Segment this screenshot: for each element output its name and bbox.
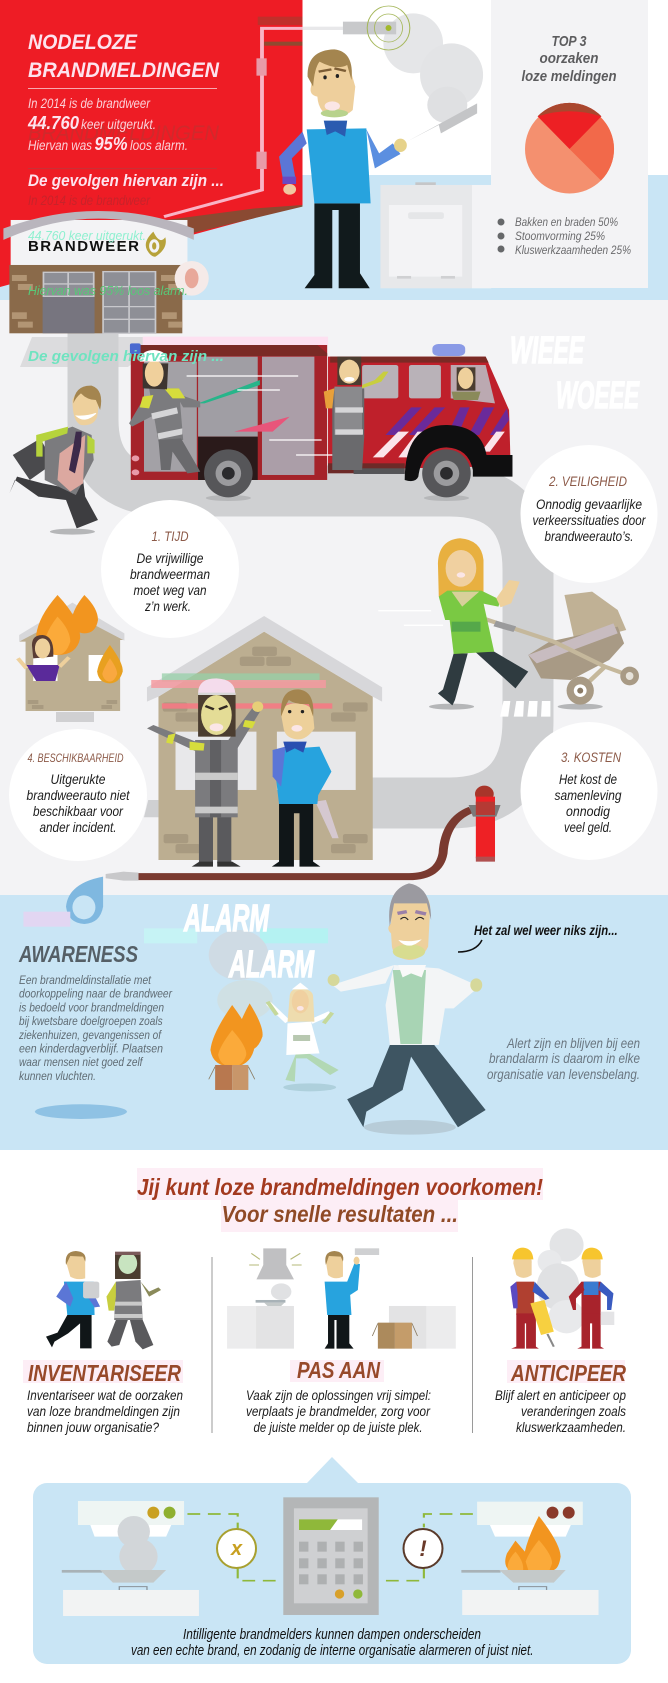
illustration: pas aan (227, 1248, 456, 1349)
callout circle: 2. veiligheid: brandweerauto’s. (544, 528, 634, 544)
pie legend (498, 217, 631, 257)
hydrant and hose (106, 786, 501, 881)
callout circle: 2. veiligheid: verkeerssituaties door (532, 512, 647, 528)
inventariseer text (27, 1360, 183, 1435)
title block: Hiervan was (28, 138, 92, 153)
title block: BRANDMELDINGEN (28, 122, 220, 145)
callout circle: 1. tijd: brandweerman (130, 566, 210, 582)
pas aan text: PAS AAN (297, 1357, 380, 1383)
kitchen cabinet (380, 182, 491, 288)
smart detector caption: van een echte brand, en zodanig de interne organisatie alarmeren of juist niet. (131, 1643, 534, 1659)
callout circle: 1. tijd: De vrijwillige (136, 550, 204, 566)
title block: In 2014 is de brandweer (28, 193, 150, 208)
callout circle: 1. tijd: moet weg van (134, 582, 207, 598)
anticipeer text: Blijf alert en anticipeer op (495, 1387, 626, 1403)
small house foundation (56, 712, 94, 722)
callout circle: 1. tijd (101, 500, 239, 638)
panel: smart detector (33, 1457, 631, 1664)
fire station (6, 213, 209, 333)
dividers (212, 1257, 473, 1433)
character: angry firefighter (147, 678, 263, 867)
awareness text: een kinderdagverblijf. Plaatsen (19, 1042, 163, 1056)
anticipeer text: veranderingen zoals (521, 1403, 626, 1419)
callout circle: 4. beschikbaarheid: 4. BESCHIKBAARHEID (28, 751, 124, 765)
awareness text: Een brandmeldinstallatie met (19, 973, 152, 987)
panel: top 3 heading: loze meldingen (522, 68, 616, 85)
character: woman with stroller (378, 538, 639, 717)
illustration: inventariseer (46, 1251, 161, 1349)
pie legend: Bakken en braden 50% (515, 217, 618, 229)
awareness text: bij kwetsbare doelgroepen zoals (19, 1014, 163, 1028)
ghost labels over fire station: Hiervan was 95% loos alarm. (28, 283, 188, 298)
anticipeer text: kluswerkzaamheden. (516, 1419, 626, 1435)
icon: detector with steam (62, 1501, 199, 1616)
alert text: organisatie van levensbelang. (487, 1066, 640, 1082)
panel: top 3 background (491, 0, 648, 288)
sound effect text: WIEEE (510, 330, 585, 372)
title block: 44.760 (27, 113, 79, 133)
icon: exclamation status: ! (419, 1536, 427, 1561)
inventariseer text: van loze brandmeldingen zijn (27, 1403, 180, 1419)
pie chart: oorzaken (525, 103, 614, 194)
inventariseer text: INVENTARISEER (28, 1360, 181, 1386)
pale tint blocks behind headings (23, 1168, 625, 1383)
awareness text: ziekenhuizen, gevangenissen of (18, 1028, 162, 1042)
callout circle: 3. kosten: veel geld. (564, 819, 612, 835)
ghost teal label: De gevolgen hiervan zijn ... (28, 348, 224, 365)
title block: NODELOZE (28, 31, 138, 54)
alert text (487, 1035, 640, 1082)
inventariseer text: binnen jouw organisatie? (27, 1419, 159, 1435)
title block: keer uitgerukt. (81, 117, 156, 132)
character: truck driver (452, 367, 481, 400)
panel: top 3 heading: TOP 3 (552, 33, 587, 50)
fire station sign: BRANDWEER (28, 238, 139, 255)
pie legend: Kluswerkzaamheden 25% (515, 245, 631, 257)
icon: exclamation status (404, 1529, 442, 1568)
illustration: anticipeer (510, 1228, 614, 1349)
title block: loos alarm. (130, 138, 188, 153)
dashed connectors (187, 1514, 473, 1581)
sound effect text (510, 330, 640, 417)
inventariseer text: Inventariseer wat de oorzaken (27, 1387, 183, 1403)
title block: 95% (94, 134, 128, 154)
awareness text: doorkoppeling naar de brandweer (19, 987, 173, 1001)
icon: water drop ring and puddle (23, 877, 328, 1119)
awareness text: AWARENESS (18, 941, 139, 967)
character: laughing doctor (328, 883, 486, 1135)
panel: top 3 heading: oorzaken (540, 50, 598, 67)
alarm pipe and detector (164, 6, 483, 233)
callout circle: 1. tijd: 1. TIJD (152, 528, 188, 544)
character: nurse (268, 983, 339, 1091)
character: firefighter on rear step (129, 350, 200, 473)
character: running volunteer (9, 386, 101, 535)
pas aan text: verplaats je brandmelder, zorg voor (246, 1403, 431, 1419)
pie legend: Stoomvorming 25% (515, 231, 605, 243)
callout circle: 3. kosten: onnodig (566, 803, 610, 819)
icon: detector with flames (461, 1502, 599, 1615)
icon: control panel (283, 1497, 379, 1615)
callout circle: 3. kosten: samenleving (554, 787, 622, 803)
section heading: Voor snelle resultaten ... (222, 1201, 458, 1227)
burning box with smoke (209, 930, 273, 1090)
section heading: Jij kunt loze brandmeldingen voorkomen! (137, 1174, 543, 1200)
callout circle: 3. kosten: 3. KOSTEN (561, 749, 622, 765)
callout circle: 4. beschikbaarheid (9, 729, 147, 861)
title block: BRANDMELDINGEN (28, 59, 220, 82)
alarm sound text: ALARM (183, 898, 270, 940)
pas aan text: de juiste melder op de juiste plek. (254, 1419, 422, 1435)
ghost labels over fire station: 44.760 keer uitgerukt. (28, 228, 146, 243)
small burning house (18, 595, 124, 711)
callout circle: 2. veiligheid: 2. VEILIGHEID (548, 473, 627, 489)
character: man blue shirt at house (272, 689, 339, 867)
awareness text: kunnen vluchten. (19, 1069, 96, 1083)
awareness text (18, 941, 173, 1083)
callout circle: 4. beschikbaarheid: brandweerauto niet (26, 787, 130, 803)
anticipeer text (495, 1360, 626, 1435)
alert text: Alert zijn en blijven bij een (506, 1035, 640, 1051)
title block: De gevolgen hiervan zijn ... (28, 171, 224, 190)
ghost labels over fire station (28, 228, 188, 298)
title block (27, 31, 224, 208)
alert text: brandalarm is daarom in elke (489, 1050, 640, 1066)
awareness text: waar mensen niet goed zelf (19, 1055, 144, 1069)
speech bubble text: Het zal wel weer niks zijn... (474, 922, 618, 938)
smart detector caption: Intilligente brandmelders kunnen dampen onderscheiden (183, 1627, 481, 1643)
callout circle: 4. beschikbaarheid: Uitgerukte (50, 771, 106, 787)
awareness text: is bedoeld voor brandmeldingen (19, 1000, 164, 1014)
alarm sound text (183, 898, 315, 986)
callout circle: 4. beschikbaarheid: beschikbaar voor (33, 803, 124, 819)
icon: x status (217, 1529, 256, 1568)
callout circle: 1. tijd: z’n werk. (144, 598, 191, 614)
speech bubble text (458, 922, 618, 952)
road (20, 320, 528, 803)
callout circle: 4. beschikbaarheid: ander incident. (40, 819, 116, 835)
callout circle: 3. kosten: Het kost de (559, 771, 617, 787)
anticipeer text: ANTICIPEER (510, 1360, 626, 1386)
character: worried man with knife (279, 49, 477, 288)
callout circle: 3. kosten (520, 722, 658, 860)
icon: x status: x (230, 1538, 243, 1560)
pas aan text: Vaak zijn de oplossingen vrij simpel: (246, 1387, 431, 1403)
title block: In 2014 is de brandweer (28, 96, 150, 111)
callout circle: 2. veiligheid: Onnodig gevaarlijke (536, 496, 642, 512)
character: firefighter at cab door (324, 357, 389, 470)
callout circle: 2. veiligheid (520, 445, 658, 583)
pas aan text (246, 1357, 431, 1435)
big house (144, 616, 382, 860)
smart detector caption (131, 1627, 534, 1659)
section heading (137, 1174, 543, 1227)
alarm sound text: ALARM (228, 944, 315, 986)
fire truck (130, 337, 512, 501)
panel: top 3 heading (522, 33, 616, 85)
